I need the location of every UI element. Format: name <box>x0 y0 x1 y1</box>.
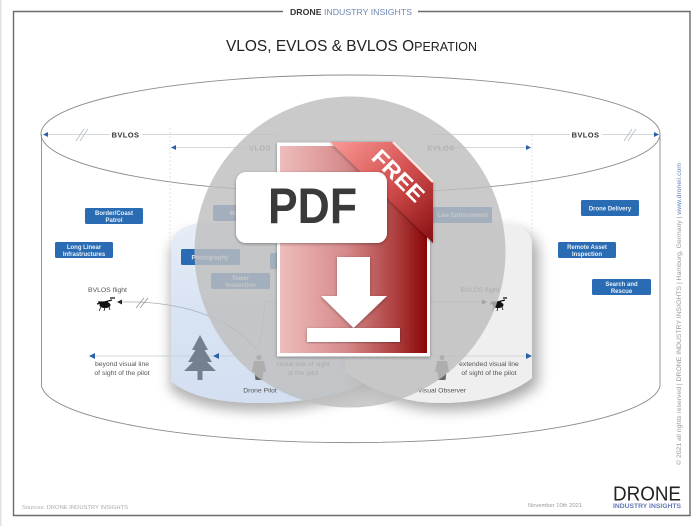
label: BVLOS flight left: BVLOS flight <box>88 287 127 294</box>
use case: Long Linear Infrastructures <box>55 242 113 258</box>
flight links <box>117 298 487 350</box>
label: beyond visual line: beyond visual line <box>95 361 149 368</box>
date: November 10th 2021 <box>528 503 582 509</box>
label: extended visual line <box>459 361 519 377</box>
label: VLOS: VLOS <box>249 144 271 152</box>
BVLOS cylinder outline <box>41 75 660 443</box>
use case: Search and Rescue: Search and <box>605 282 638 288</box>
icon: visual observer <box>435 355 449 380</box>
use case: Law Enforcement <box>433 207 492 223</box>
use case: Long Linear Infrastructures: Infrastructures <box>63 252 106 258</box>
logo: INDUSTRY INSIGHTS <box>613 503 681 510</box>
use case: Border/Coast Patrol: Patrol <box>105 218 123 224</box>
label: BVLOS left: BVLOS <box>112 130 139 140</box>
sources: Sources: DRONE INDUSTRY INSIGHTS <box>22 505 128 511</box>
label: BVLOS right: BVLOS <box>572 130 599 140</box>
use case: Tower Inspection <box>211 273 270 289</box>
logo: DRONE <box>613 484 681 506</box>
range markers <box>43 128 659 360</box>
header brand line: DRONE INDUSTRY INSIGHTS <box>290 8 413 17</box>
icon: drone pilot <box>252 355 266 380</box>
use case: Photography: Photography <box>192 256 229 262</box>
icon: drone left <box>97 298 115 311</box>
label: Visual Observer: Visual Observer <box>418 388 467 394</box>
use case: Remote Asset Inspection <box>558 242 616 258</box>
sight lines <box>89 353 532 359</box>
use case: Mapping: Mapping <box>230 211 255 217</box>
label: visual line of sight: of the pilot <box>287 370 319 377</box>
label: BVLOS flight right: BVLOS flight <box>461 287 500 294</box>
pdf download icon <box>236 142 433 356</box>
download bar <box>307 328 400 342</box>
icon: tree <box>184 335 216 380</box>
label: visual line of sight <box>276 361 330 377</box>
download arrow <box>321 257 387 328</box>
EVLOS area: grey cylinder <box>345 223 532 403</box>
use case: Law Enforcement: Law Enforcement <box>437 213 488 219</box>
use case: Drone Delivery: Drone Delivery <box>589 206 632 212</box>
free ribbon: FREE <box>367 144 430 207</box>
label: beyond visual line: of sight of the pilot <box>94 370 150 377</box>
VLOS area: blue cylinder <box>171 223 372 403</box>
use case: Drone Delivery <box>581 200 639 216</box>
icon: drone right <box>490 298 507 311</box>
use case: Long Linear Infrastructures: Long Linear <box>67 245 102 251</box>
label: extended visual line: of sight of the pilot <box>461 370 517 377</box>
use case: Tower Inspection: Tower <box>232 276 250 282</box>
use case: Mapping <box>213 205 272 221</box>
pdf label <box>236 172 387 243</box>
label: extended visual line: extended visual line <box>459 361 519 368</box>
use case: Agriculture <box>270 253 320 269</box>
use case: Border/Coast Patrol: Border/Coast <box>95 211 133 217</box>
download overlay disc <box>194 96 506 408</box>
pdf label: PDF <box>268 178 357 234</box>
label: EVLOS: EVLOS <box>427 144 455 152</box>
use case: Photography <box>181 249 240 265</box>
rotated copyright line: © 2021 all rights reserved | DRONE INDUSTRY INSIGHTS | Hamburg, Germany | www.droneii.com <box>675 162 683 465</box>
use case: Search and Rescue <box>592 279 651 295</box>
label: visual line of sight: visual line of sight <box>276 361 330 368</box>
free ribbon <box>330 142 433 243</box>
use case: Border/Coast Patrol <box>85 208 143 224</box>
label: beyond visual line <box>94 361 150 377</box>
use case: Tower Inspection: Inspection <box>225 283 256 289</box>
title: VLOS, EVLOS & BVLOS OPERATION <box>226 38 477 55</box>
use case: Remote Asset Inspection: Remote Asset <box>567 245 607 251</box>
pdf page <box>277 142 430 356</box>
use case: Search and Rescue: Rescue <box>611 289 633 295</box>
use case: Remote Asset Inspection: Inspection <box>572 252 602 258</box>
label: Drone Pilot: Drone Pilot <box>243 388 277 394</box>
